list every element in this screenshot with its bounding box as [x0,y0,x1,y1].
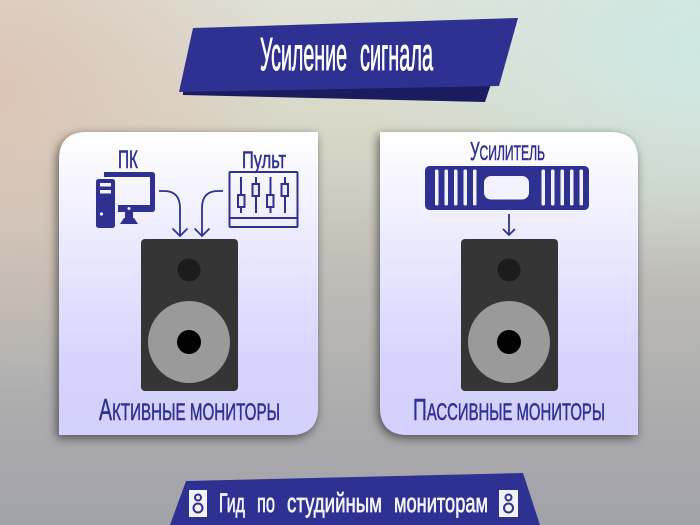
label: active monitors: АКТИВНЫЕ МОНИТОРЫ [99,392,280,427]
footer banner [170,473,540,525]
speaker: active monitor [141,239,238,391]
icon: right speaker [499,490,518,517]
label: PC: ПК [118,146,138,174]
icon: left speaker [189,490,207,517]
title text: Усиление [260,28,347,80]
arrow: mixer to speaker [194,191,223,236]
footer text: по [257,488,275,518]
icon: amplifier [425,166,589,210]
arrow: computer to speaker [159,191,188,236]
footer text: мониторам [394,488,488,518]
panel: passive monitors [380,132,638,435]
title banner [179,18,518,102]
label: mixer: Пульт [242,147,286,174]
label: amplifier: УСИЛИТЕЛЬ [470,136,545,166]
icon: mixing console [229,172,298,227]
panel: active monitors [59,132,318,435]
footer text: студийным [287,488,382,518]
arrow: amplifier to speaker [503,214,515,235]
footer text [219,488,488,518]
icon: computer [96,172,155,228]
footer text: Гид [219,488,245,518]
speaker: passive monitor [461,239,558,391]
title banner: сигнала [360,28,433,80]
